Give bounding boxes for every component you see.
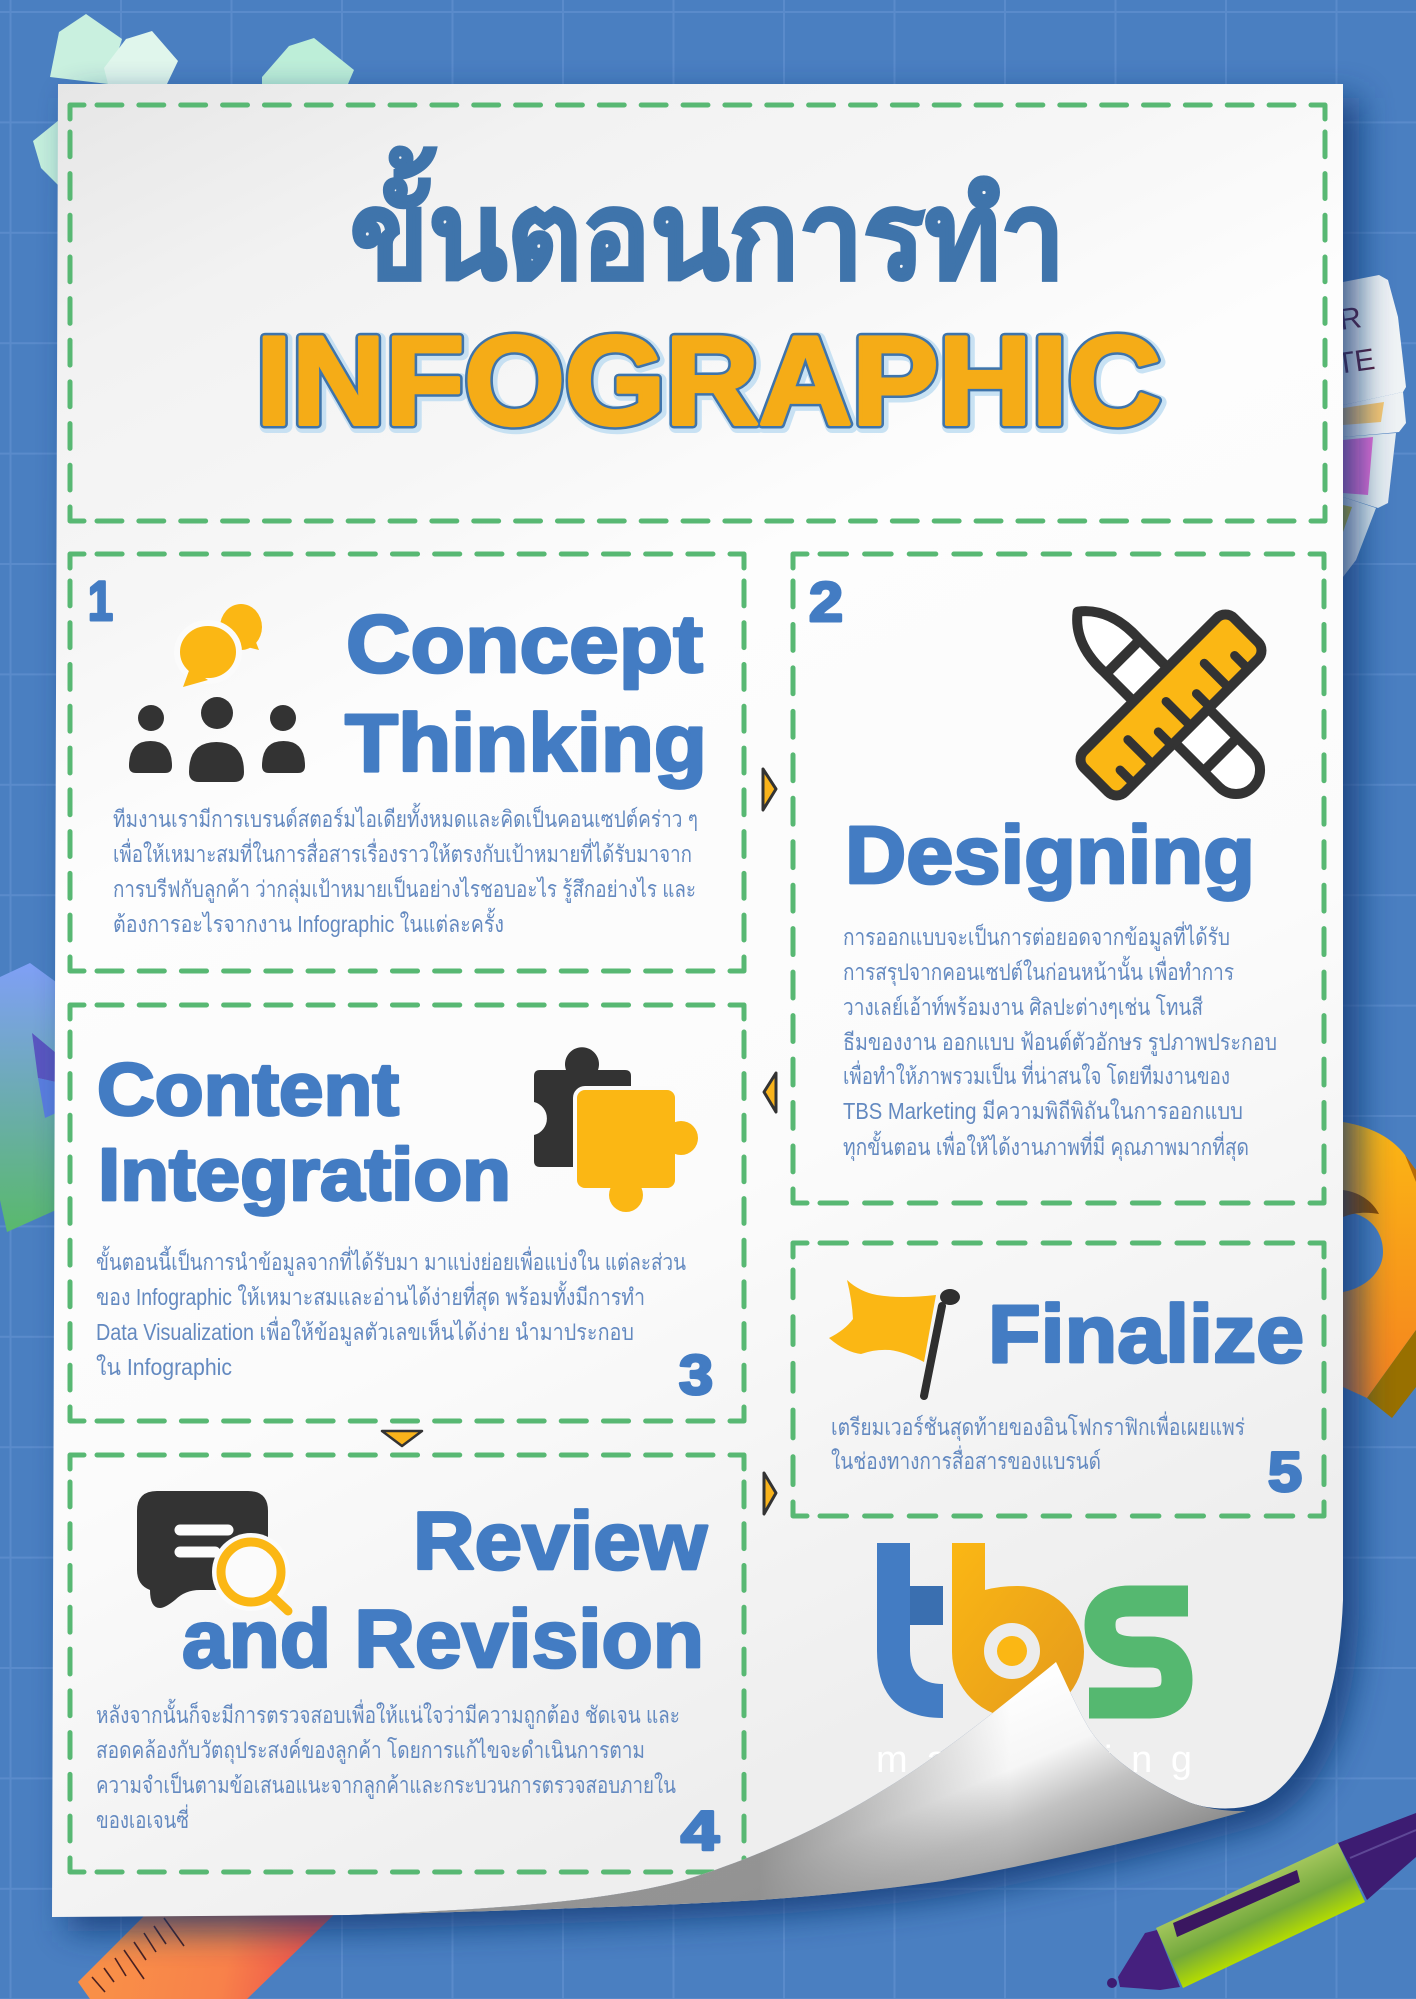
body text 3: Data Visualization เพื่อให้ข้อมูลตัวเลขเห็นได้ง่าย นำมาประกอบ	[96, 1316, 634, 1346]
number 5: 5	[1268, 1440, 1302, 1503]
body text 3: ใน Infographic	[96, 1354, 232, 1380]
heading: Concept Thinking: Thinking	[345, 698, 707, 789]
panel 5: Finalize	[793, 1243, 1324, 1516]
heading: Review and Revision: Review	[413, 1496, 707, 1587]
heading: Review and Revision	[182, 1496, 707, 1685]
heading: Review and Revision: and Revision	[182, 1594, 704, 1685]
body text 3: ของ Infographic ให้เหมาะสมและอ่านได้ง่ายที่สุด พร้อมทั้งมีการทำ	[96, 1281, 645, 1311]
body text 4: สอดคล้องกับวัตถุประสงค์ของลูกค้า โดยการแก้ไขจะดำเนินการตาม	[96, 1737, 645, 1764]
decoration: orange ruler	[78, 1900, 349, 1999]
body text 3	[96, 1246, 686, 1380]
body text 4: ของเอเจนซี่	[96, 1804, 189, 1833]
heading: Concept Thinking: Concept	[346, 599, 703, 690]
decoration: sticky notes: TE	[1334, 343, 1377, 381]
body text 1: การบรีฟกับลูกค้า ว่ากลุ่มเป้าหมายเป็นอย่างไรชอบอะไร รู้สึกอย่างไร และ	[113, 874, 696, 903]
body text 3: ขั้นตอนนี้เป็นการนำข้อมูลจากที่ได้รับมา มาแบ่งย่อยเพื่อแบ่งใน แต่ละส่วน	[96, 1246, 686, 1276]
decoration: sticky notes	[1334, 275, 1406, 577]
icon: pencil and ruler	[1061, 595, 1270, 804]
logo word marketing: marketing	[876, 1739, 1192, 1781]
title: INFOGRAPHIC: INFOGRAPHIC	[258, 312, 1163, 453]
arrow: 1 to 2	[763, 769, 776, 810]
icon: puzzle pieces	[534, 1047, 698, 1212]
arrow: 2 to 3	[764, 1073, 776, 1112]
decoration: left gradient shape	[0, 963, 56, 1232]
body text 2: วางเลย์เอ้าท์พร้อมงาน ศิลปะต่างๆเช่น โทนสี	[843, 994, 1203, 1020]
decoration: purple and green pen	[1107, 1813, 1416, 1990]
logo letter b	[952, 1543, 1084, 1718]
heading: Concept Thinking	[345, 599, 707, 789]
body text 2: ธีมของงาน ออกแบบ ฟ้อนต์ตัวอักษร รูปภาพประกอบ	[843, 1029, 1277, 1056]
icon: flag	[829, 1280, 960, 1396]
decoration: sticky notes: R	[1337, 301, 1363, 337]
body text 2: การออกแบบจะเป็นการต่อยอดจากข้อมูลที่ได้รับ	[843, 921, 1230, 951]
panel 1: Concept Thinking	[70, 554, 744, 971]
number 2: 2	[809, 570, 843, 633]
body text 1: ทีมงานเรามีการเบรนด์สตอร์มไอเดียทั้งหมดและคิดเป็นคอนเซปต์คร่าว ๆ	[113, 803, 698, 832]
arrow: 3 to 4	[382, 1431, 422, 1446]
body text 4: หลังจากนั้นก็จะมีการตรวจสอบเพื่อให้แน่ใจว่ามีความถูกต้อง ชัดเจน และ	[96, 1699, 680, 1729]
title panel	[70, 105, 1325, 521]
number 3: 3	[679, 1343, 713, 1406]
title: INFOGRAPHIC: INFOGRAPHIC	[256, 310, 1161, 451]
logo: tbs marketing	[876, 1543, 1192, 1781]
heading: Designing: Designing	[845, 810, 1255, 901]
title: INFOGRAPHIC: INFOGRAPHIC	[256, 310, 1161, 451]
heading: Content Integration	[97, 1048, 511, 1216]
body text 5: ในช่องทางการสื่อสารของแบรนด์	[831, 1445, 1101, 1474]
icon: speech bubbles and people	[129, 604, 305, 782]
body text 5: เตรียมเวอร์ชันสุดท้ายของอินโฟกราฟิกเพื่อเผยแพร่	[831, 1411, 1245, 1441]
heading: Content Integration: Content	[97, 1048, 399, 1131]
heading: Finalize: Finalize	[988, 1289, 1304, 1380]
panel 2: Designing	[793, 554, 1324, 1203]
body text 2: เพื่อทำให้ภาพรวมเป็น ที่น่าสนใจ โดยทีมงานของ	[843, 1060, 1230, 1089]
title: Thai line: ขั้นตอนการทำ	[350, 147, 1065, 304]
body text 2: TBS Marketing มีความพิถีพิถันในการออกแบบ	[843, 1098, 1243, 1124]
body text 4: ความจำเป็นตามข้อเสนอแนะจากลูกค้าและกระบวนการตรวจสอบภายใน	[96, 1770, 676, 1799]
body text 2	[843, 921, 1277, 1161]
heading: Content Integration: Integration	[98, 1133, 511, 1216]
body text 2: การสรุปจากคอนเซปต์ในก่อนหน้านั้น เพื่อทำการ	[843, 956, 1234, 986]
decoration: mint crystals	[33, 14, 354, 186]
body text 4	[96, 1699, 680, 1833]
panel 3: Content Integration	[70, 1005, 744, 1421]
arrow: 4 to 5	[764, 1473, 776, 1514]
body text 2: ทุกขั้นตอน เพื่อให้ได้งานภาพที่มี คุณภาพมากที่สุด	[843, 1131, 1249, 1161]
number 1: 1	[88, 569, 113, 632]
body text 5	[831, 1411, 1245, 1474]
logo letter t	[877, 1543, 943, 1718]
body text 1: เพื่อให้เหมาะสมที่ในการสื่อสารเรื่องราวให้ตรงกับเป้าหมายที่ได้รับมาจาก	[113, 838, 692, 867]
page curl underside	[349, 1662, 1246, 1915]
body text 1: ต้องการอะไรจากงาน Infographic ในแต่ละครั้ง	[113, 908, 504, 937]
body text 1	[113, 803, 698, 937]
icon: chat bubble with magnifier	[137, 1491, 290, 1611]
logo letter s	[1089, 1601, 1188, 1703]
number 4: 4	[681, 1799, 719, 1862]
panel 4: Review and Revision	[70, 1455, 744, 1872]
decoration: orange map pin	[1343, 1122, 1416, 1418]
